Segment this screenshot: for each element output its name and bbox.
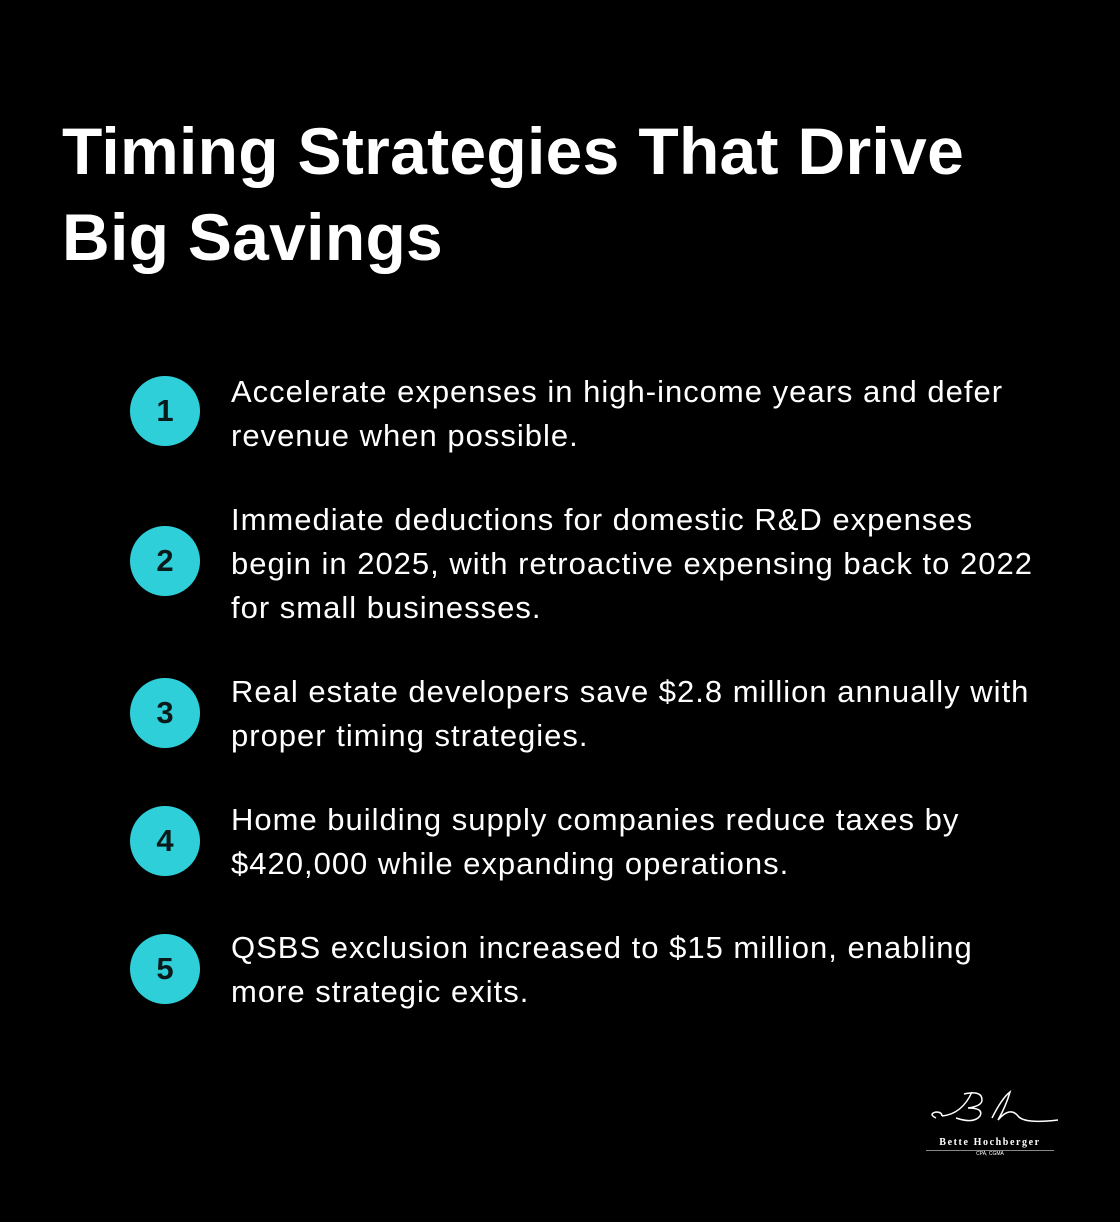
text 1: [231, 374, 1003, 453]
number 2: 2: [156, 543, 174, 578]
number 5: 5: [156, 951, 174, 986]
text 4: [231, 802, 959, 881]
logo: Bette Hochberger: [939, 1137, 1041, 1148]
title: Timing Strategies That Drive: [62, 114, 964, 188]
text 4: Home building supply companies reduce taxes by: [231, 802, 959, 837]
item 4: [130, 802, 959, 881]
text 3: [231, 674, 1029, 753]
number 2: [130, 526, 200, 596]
number 4: [130, 806, 200, 876]
text 3: proper timing strategies.: [231, 718, 589, 753]
number 3: [130, 678, 200, 748]
text 2: for small businesses.: [231, 590, 541, 625]
item 2: [130, 502, 1033, 625]
title: [62, 114, 964, 274]
text 1: Accelerate expenses in high-income years and defer: [231, 374, 1003, 409]
text 5: QSBS exclusion increased to $15 million, enabling: [231, 930, 973, 965]
title: Big Savings: [62, 200, 443, 274]
number 5: [130, 934, 200, 1004]
item 5: [130, 930, 973, 1009]
text 2: [231, 502, 1033, 625]
logo: [926, 1090, 1058, 1157]
logo: CPA, CGMA: [976, 1151, 1004, 1157]
text 5: [231, 930, 973, 1009]
text 2: Immediate deductions for domestic R&D expenses: [231, 502, 973, 537]
text 1: revenue when possible.: [231, 418, 579, 453]
number 4: 4: [156, 823, 174, 858]
item 3: [130, 674, 1029, 753]
number 3: 3: [156, 695, 174, 730]
number 1: [130, 376, 200, 446]
text 5: more strategic exits.: [231, 974, 529, 1009]
text 2: begin in 2025, with retroactive expensing back to 2022: [231, 546, 1033, 581]
number 1: 1: [156, 393, 174, 428]
text 3: Real estate developers save $2.8 million annually with: [231, 674, 1029, 709]
item 1: [130, 374, 1003, 453]
text 4: $420,000 while expanding operations.: [231, 846, 789, 881]
